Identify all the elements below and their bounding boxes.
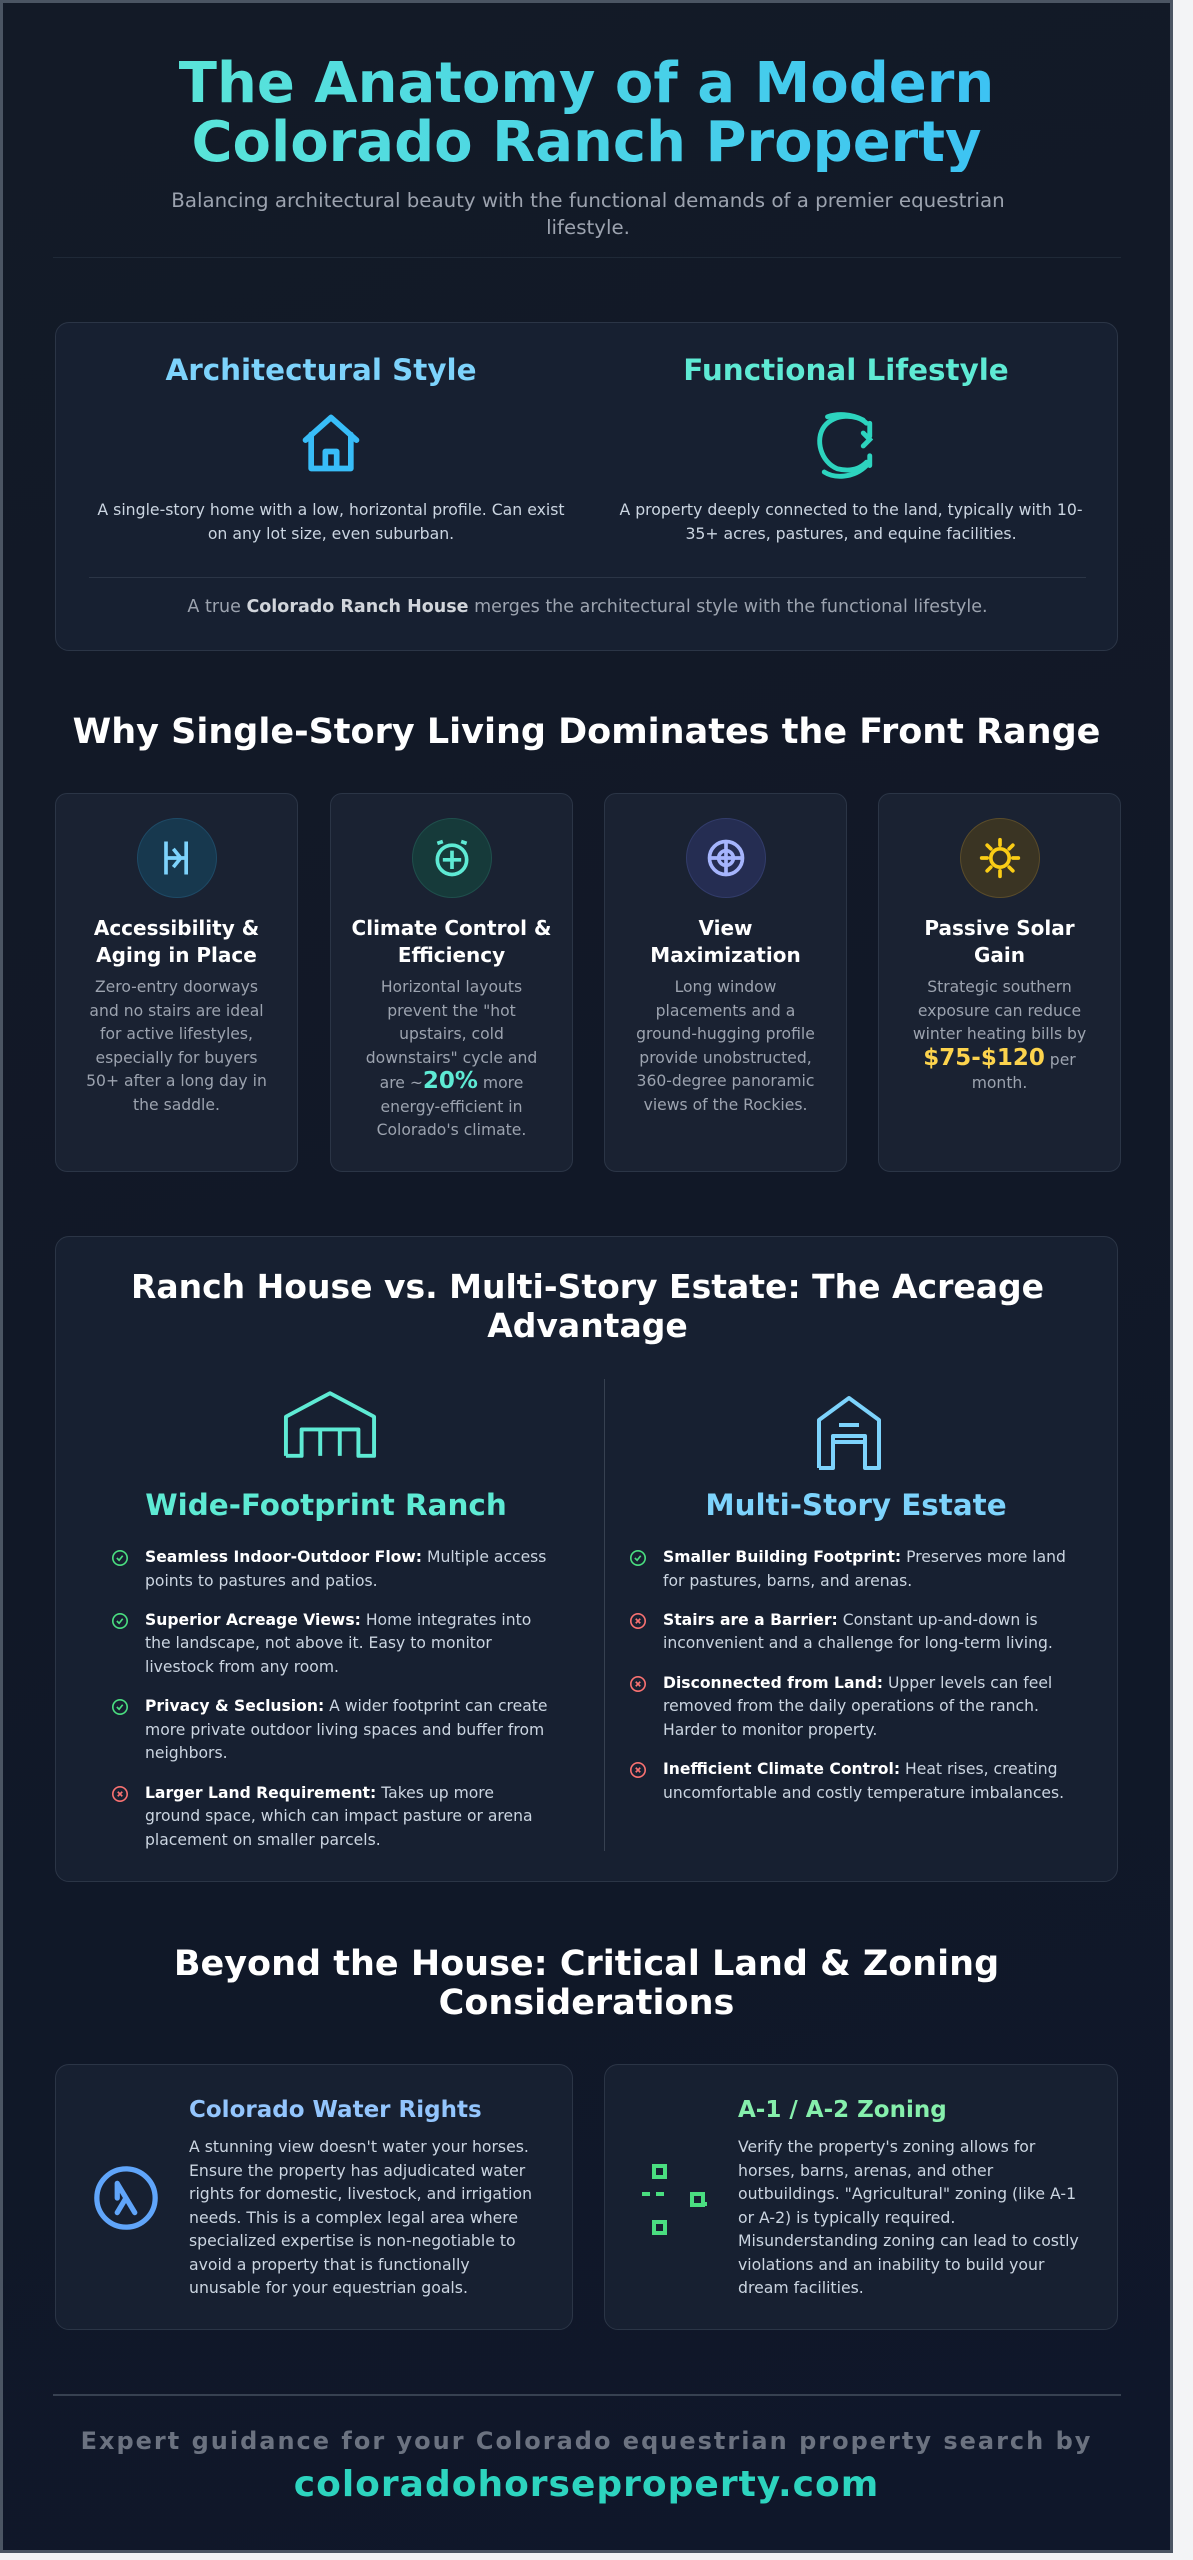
card: accessibility xyxy=(55,793,298,1172)
heading: comparison: Ranch House vs. Multi-Story Estate: The Acreage xyxy=(131,1267,1044,1306)
subtitle: Balancing architectural beauty with the functional demands of a premier equestrian lifestyle. xyxy=(171,189,1005,239)
heading: beyond the house xyxy=(174,1944,999,2023)
heading: architectural style: Architectural Style xyxy=(165,353,477,387)
icon: zoning xyxy=(642,2164,707,2235)
card: accessibility: Accessibility & Aging in Place xyxy=(94,916,259,967)
footer: guidance: Expert guidance for your Colorado equestrian property search by xyxy=(81,2427,1092,2455)
heading: single-story: Why Single-Story Living Dominates the Front Range xyxy=(73,712,1100,752)
text: architectural: A single-story home with a low, horizontal profile. Can exist on any lot size, even suburban. xyxy=(97,500,565,543)
icon: multi-story house xyxy=(817,1396,881,1470)
card: water rights xyxy=(55,2064,573,2330)
item: smaller footprint: Smaller Building Footprint: Preserves more land for pastures, barns, and arenas. xyxy=(663,1548,1066,1590)
item: privacy: Privacy & Seclusion: A wider footprint can create more private outdoor living spaces and buffer from neighbors. xyxy=(145,1697,547,1762)
item: seamless: Seamless Indoor-Outdoor Flow: Multiple access points to pastures and patios. xyxy=(145,1548,546,1590)
card: climate: Horizontal layouts prevent the "hot upstairs, cold downstairs" cycle and are ~20% more energy-efficient in Colorado's climate. xyxy=(366,978,537,1139)
item: disconnected: Disconnected from Land: Upper levels can feel removed from the daily operations of the ranch. Harder to monitor property. xyxy=(663,1674,1052,1739)
text: functional: A property deeply connected to the land, typically with 10-35+ acres, pastures, and equine facilities. xyxy=(619,500,1083,543)
heading: comparison xyxy=(131,1267,1044,1345)
item: climate: Inefficient Climate Control: Heat rises, creating uncomfortable and costly temperature imbalances. xyxy=(663,1760,1064,1802)
card: solar xyxy=(878,793,1121,1172)
icon: lasso xyxy=(817,412,874,479)
card: climate xyxy=(330,793,573,1172)
heading: multi-story estate: Multi-Story Estate xyxy=(705,1488,1007,1522)
card: climate: Climate Control & Efficiency xyxy=(352,916,551,967)
heading: functional lifestyle: Functional Lifestyle xyxy=(683,353,1009,387)
heading: beyond the house: Considerations xyxy=(439,1983,734,2023)
item: land requirement: Larger Land Requirement: Takes up more ground space, which can impact pasture or arena placement on smaller parcels. xyxy=(145,1784,533,1849)
heading: beyond the house: Beyond the House: Critical Land & Zoning xyxy=(174,1944,999,1984)
title xyxy=(43,54,1130,172)
card: view: Long window placements and a ground-hugging profile provide unobstructed, 360-degree panoramic views of the Rockies. xyxy=(636,978,815,1114)
list: ranch xyxy=(112,1548,547,1849)
card: view: View Maximization xyxy=(650,916,801,967)
card: solar: Passive Solar Gain xyxy=(924,916,1075,967)
title: zoning: A-1 / A-2 Zoning xyxy=(738,2097,947,2123)
text: merge statement: A true Colorado Ranch House merges the architectural style with the functional lifestyle. xyxy=(187,597,988,617)
panel: style vs lifestyle xyxy=(55,322,1118,651)
icon: accessibility xyxy=(136,818,216,898)
text: zoning: Verify the property's zoning allows for horses, barns, arenas, and other outbuildings. "Agricultural" zoning (like A-1 or A-2) is typically required. Misunderstanding zoning can lead to costly violations and an inability to build your dream facilities. xyxy=(738,2137,1079,2297)
text: water rights: A stunning view doesn't water your horses. Ensure the property has adjudicated water rights for domestic, livestock, and irrigation needs. This is a complex legal area where specialized expertise is non-negotiable to avoid a property that is functionally unusable for your equestrian goals. xyxy=(189,2137,532,2297)
icon: ranch house xyxy=(284,1391,376,1458)
panel: ranch vs multi-story xyxy=(55,1236,1118,1882)
footer: url: coloradohorseproperty.com xyxy=(294,2464,879,2505)
title: The Anatomy of a Modern xyxy=(179,51,994,116)
list: multi-story xyxy=(630,1548,1066,1802)
item: views: Superior Acreage Views: Home integrates into the landscape, not above it. Easy to monitor livestock from any room. xyxy=(145,1611,531,1676)
card: view xyxy=(604,793,847,1172)
icon: water xyxy=(94,2166,158,2230)
card: zoning xyxy=(604,2064,1118,2330)
card: accessibility: Zero-entry doorways and no stairs are ideal for active lifestyles, especially for buyers 50+ after a long day in the saddle. xyxy=(86,978,267,1114)
card: solar: Strategic southern exposure can reduce winter heating bills by $75-$120 per month. xyxy=(913,978,1086,1092)
title: water rights: Colorado Water Rights xyxy=(189,2097,482,2123)
title: Colorado Ranch Property xyxy=(191,110,982,175)
item: stairs: Stairs are a Barrier: Constant up-and-down is inconvenient and a challenge for long-term living. xyxy=(663,1611,1053,1652)
icon: clock xyxy=(412,818,492,898)
icon: target xyxy=(686,818,766,898)
icon: house xyxy=(302,414,360,472)
heading: comparison: Advantage xyxy=(487,1306,688,1345)
heading: wide-footprint ranch: Wide-Footprint Ranch xyxy=(145,1488,507,1522)
icon: sun xyxy=(960,818,1040,898)
